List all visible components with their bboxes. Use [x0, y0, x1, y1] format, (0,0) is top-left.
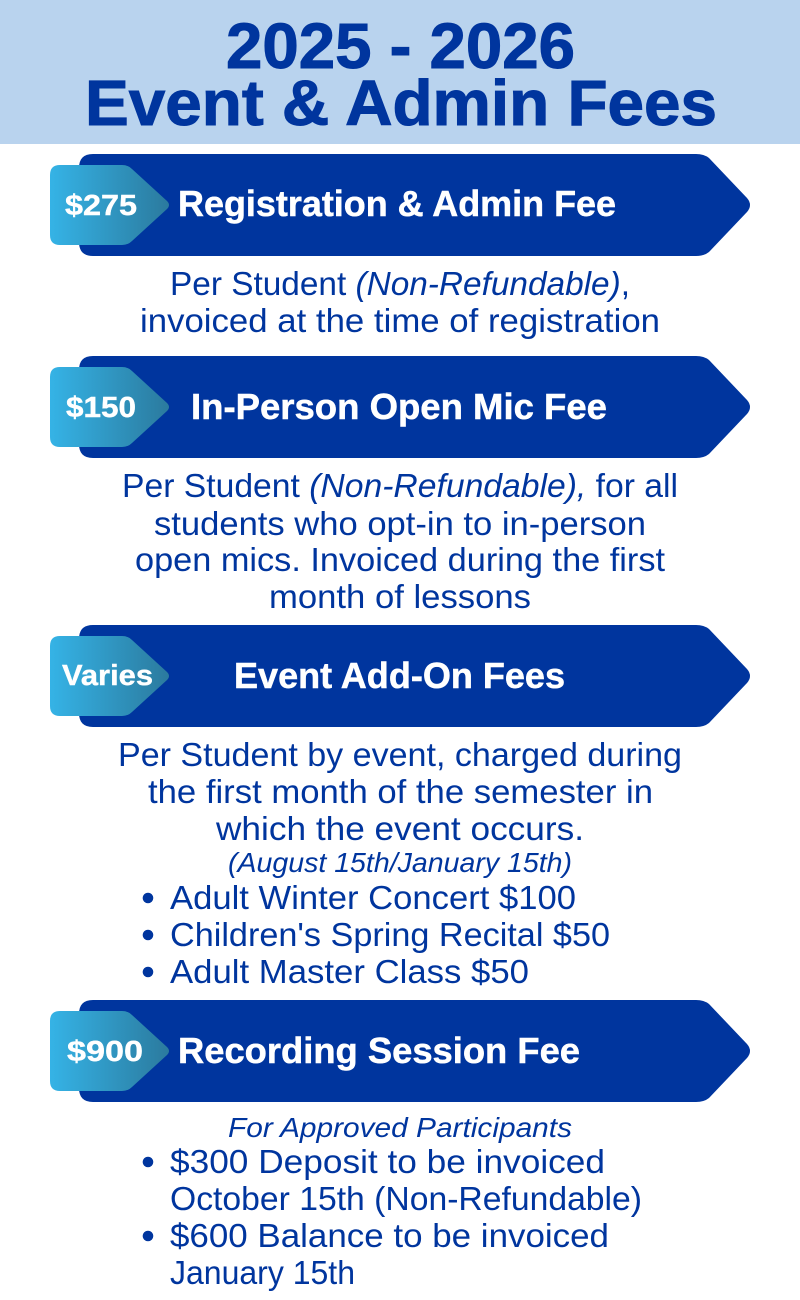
title: 2025 - 2026: [226, 10, 575, 82]
title: Event & Admin Fees: [85, 67, 717, 139]
title: [85, 10, 717, 139]
text: registration details: [140, 265, 660, 339]
list: recording payments: [143, 1143, 642, 1291]
list: event prices: Children's Spring Recital $50: [170, 916, 610, 953]
panel: open mic fee banner: [50, 356, 750, 458]
text: event add-on details: [118, 736, 682, 878]
list: event prices: [143, 879, 610, 990]
text: open mic details: month of lessons: [269, 578, 531, 615]
list: recording payments: January 15th: [170, 1254, 355, 1291]
panel: registration fee banner: [50, 154, 750, 256]
text: open mic details: open mics. Invoiced during the first: [135, 541, 665, 578]
title band: [0, 0, 800, 144]
panel: event add-on banner: [50, 625, 750, 727]
panel: recording session banner: $900: [67, 1036, 143, 1068]
text: event add-on details: Per Student by event, charged during: [118, 736, 682, 773]
list: event prices: Adult Winter Concert $100: [170, 879, 576, 916]
list: recording payments: October 15th (Non-Refundable): [170, 1180, 642, 1217]
text: event add-on details: (August 15th/January 15th): [228, 847, 572, 878]
text: approved participants note: For Approved Participants: [228, 1112, 572, 1143]
list: event prices: Adult Master Class $50: [170, 953, 529, 990]
panel: recording session banner: Recording Session Fee: [178, 1030, 580, 1071]
panel: open mic fee banner: In-Person Open Mic Fee: [191, 386, 607, 427]
text: open mic details: students who opt-in to in-person: [154, 505, 646, 542]
text: registration details: Per Student (Non-Refundable),: [170, 265, 630, 302]
panel: open mic fee banner: $150: [66, 392, 136, 424]
text: open mic details: Per Student (Non-Refundable), for all: [122, 467, 678, 504]
panel: registration fee banner: Registration & Admin Fee: [178, 183, 616, 224]
text: open mic details: [122, 467, 678, 615]
list: recording payments: $600 Balance to be invoiced: [170, 1217, 609, 1254]
panel: event add-on banner: Event Add-On Fees: [234, 655, 565, 696]
text: event add-on details: which the event occurs.: [215, 810, 584, 847]
text: event add-on details: the first month of the semester in: [148, 773, 653, 810]
text: registration details: invoiced at the time of registration: [140, 302, 660, 339]
panel: recording session banner: [50, 1000, 750, 1102]
list: recording payments: $300 Deposit to be invoiced: [170, 1143, 605, 1180]
panel: registration fee banner: $275: [65, 190, 137, 222]
panel: event add-on banner: Varies: [62, 660, 153, 692]
